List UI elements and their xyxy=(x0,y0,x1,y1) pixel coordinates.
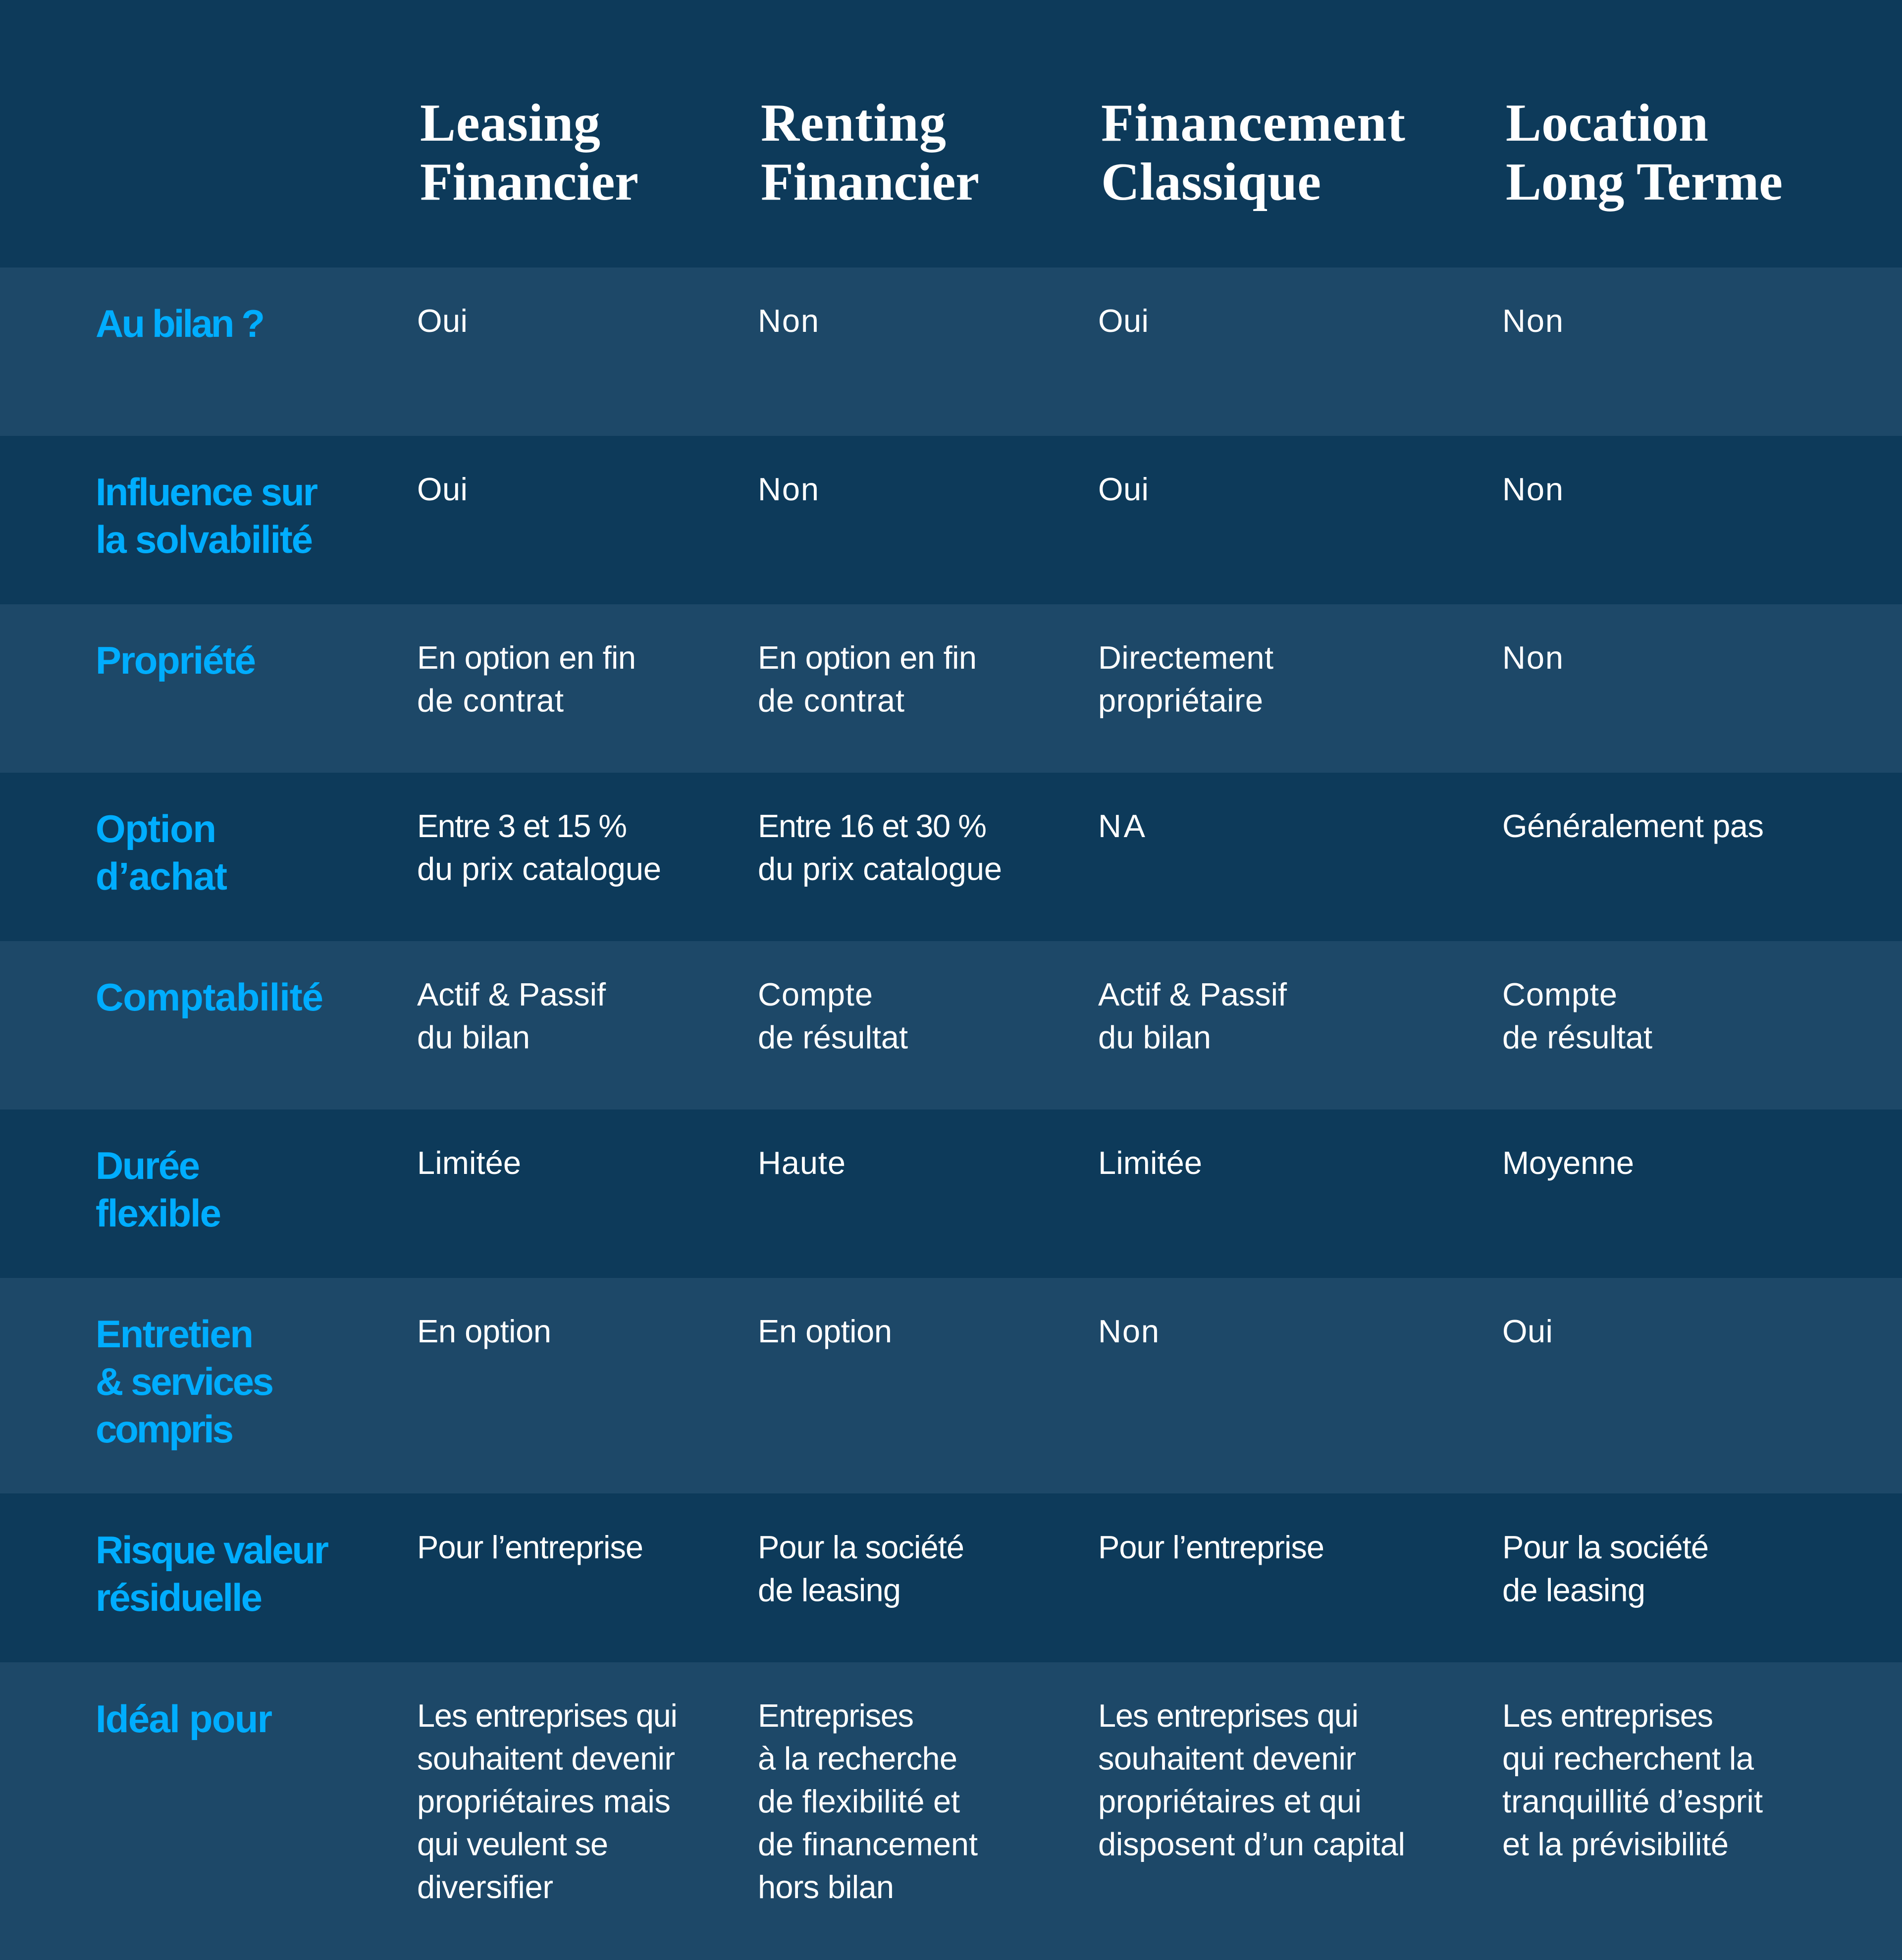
cell: financement: Actif & Passif xyxy=(1098,976,1287,1012)
cell: location: Moyenne xyxy=(1502,1145,1634,1181)
cell: location: de résultat xyxy=(1502,1019,1652,1055)
row label: résiduelle xyxy=(96,1576,263,1619)
cell: renting: de leasing xyxy=(758,1572,901,1608)
heading: Renting Financier: Renting xyxy=(761,94,946,153)
cell: location: Compte xyxy=(1502,976,1617,1012)
cell: renting: Pour la société xyxy=(758,1529,964,1565)
cell: location: tranquillité d’esprit xyxy=(1502,1783,1763,1819)
row label: Comptabilité xyxy=(96,975,323,1019)
heading: Renting Financier: Financier xyxy=(761,153,979,212)
heading: Leasing Financier: Leasing xyxy=(420,94,600,153)
cell: financement: Oui xyxy=(1098,303,1149,339)
cell: leasing: souhaitent devenir xyxy=(417,1741,675,1776)
heading: Financement Classique: Classique xyxy=(1101,153,1321,212)
row label: Entretien xyxy=(96,1312,254,1356)
cell: leasing: Oui xyxy=(417,303,468,339)
cell: financement: souhaitent devenir xyxy=(1098,1741,1356,1776)
cell: location: et la prévisibilité xyxy=(1502,1826,1729,1862)
cell: leasing: Les entreprises qui xyxy=(417,1697,678,1734)
cell: leasing: du prix catalogue xyxy=(417,851,661,887)
cell: renting: à la recherche xyxy=(758,1741,957,1776)
row label: d’achat xyxy=(96,854,227,898)
cell: leasing: propriétaires mais xyxy=(417,1783,671,1819)
cell: financement: du bilan xyxy=(1098,1019,1211,1055)
cell: renting: En option en fin xyxy=(758,639,977,676)
row label: compris xyxy=(96,1407,234,1451)
row: Influence sur la solvabilité xyxy=(0,436,1902,604)
cell: leasing: de contrat xyxy=(417,683,564,718)
cell: financement: propriétaires et qui xyxy=(1098,1783,1362,1819)
cell: financement: Directement xyxy=(1098,639,1273,676)
header row xyxy=(420,94,1783,212)
cell: location: Les entreprises xyxy=(1502,1697,1713,1734)
row label: Durée xyxy=(96,1144,200,1187)
heading: Financement Classique: Financement xyxy=(1101,94,1405,153)
row: Idéal pour xyxy=(0,1662,1902,1960)
cell: financement: Les entreprises qui xyxy=(1098,1697,1359,1734)
row: Durée flexible xyxy=(0,1110,1902,1278)
row: Comptabilité xyxy=(0,941,1902,1110)
cell: renting: Haute xyxy=(758,1145,845,1181)
cell: location: Non xyxy=(1502,639,1563,676)
row label: flexible xyxy=(96,1191,221,1235)
cell: leasing: Entre 3 et 15 % xyxy=(417,808,627,844)
cell: renting: hors bilan xyxy=(758,1869,894,1905)
cell: location: de leasing xyxy=(1502,1572,1645,1608)
cell: leasing: En option xyxy=(417,1313,551,1349)
row label: Option xyxy=(96,807,216,850)
row label: Risque valeur xyxy=(96,1528,329,1572)
cell: renting: du prix catalogue xyxy=(758,851,1002,887)
cell: location: Non xyxy=(1502,471,1563,507)
heading: Location Long Terme: Location xyxy=(1506,94,1708,153)
heading: Leasing Financier: Financier xyxy=(420,153,638,212)
cell: location: Pour la société xyxy=(1502,1529,1709,1565)
cell: renting: Entre 16 et 30 % xyxy=(758,808,987,844)
cell: financement: NA xyxy=(1098,808,1146,844)
cell: location: qui recherchent la xyxy=(1502,1741,1754,1776)
cell: renting: de flexibilité et xyxy=(758,1783,960,1819)
row label: & services xyxy=(96,1360,274,1403)
cell: financement: propriétaire xyxy=(1098,683,1263,718)
row label: Au bilan ? xyxy=(96,302,265,345)
cell: financement: Limitée xyxy=(1098,1145,1202,1181)
cell: financement: Pour l’entreprise xyxy=(1098,1529,1324,1565)
cell: financement: Oui xyxy=(1098,471,1149,507)
cell: leasing: En option en fin xyxy=(417,639,636,676)
cell: renting: de résultat xyxy=(758,1019,908,1055)
row label: Influence sur xyxy=(96,470,318,514)
cell: renting: Non xyxy=(758,303,819,339)
cell: renting: En option xyxy=(758,1313,892,1349)
cell: location: Oui xyxy=(1502,1313,1553,1349)
cell: leasing: qui veulent se xyxy=(417,1826,608,1862)
cell: renting: de financement xyxy=(758,1826,978,1862)
row label: Propriété xyxy=(96,638,256,682)
row: Option d'achat xyxy=(0,773,1902,941)
cell: leasing: diversifier xyxy=(417,1869,553,1905)
cell: leasing: Actif & Passif xyxy=(417,976,606,1012)
cell: location: Généralement pas xyxy=(1502,808,1764,844)
cell: renting: Compte xyxy=(758,976,873,1012)
cell: leasing: Limitée xyxy=(417,1145,521,1181)
cell: renting: Entreprises xyxy=(758,1697,914,1734)
cell: leasing: du bilan xyxy=(417,1019,530,1055)
row label: Idéal pour xyxy=(96,1697,272,1741)
heading: Location Long Terme: Long Terme xyxy=(1506,153,1783,212)
cell: financement: disposent d’un capital xyxy=(1098,1826,1405,1862)
row: Risque valeur résiduelle xyxy=(0,1493,1902,1662)
row label: la solvabilité xyxy=(96,518,313,561)
cell: financement: Non xyxy=(1098,1313,1159,1349)
cell: renting: de contrat xyxy=(758,683,904,718)
row: Entretien et services compris xyxy=(0,1278,1902,1493)
cell: renting: Non xyxy=(758,471,819,507)
row: Au bilan xyxy=(0,267,1902,436)
cell: location: Non xyxy=(1502,303,1563,339)
cell: leasing: Pour l’entreprise xyxy=(417,1529,643,1565)
row: Propriété xyxy=(0,604,1902,773)
cell: leasing: Oui xyxy=(417,471,468,507)
